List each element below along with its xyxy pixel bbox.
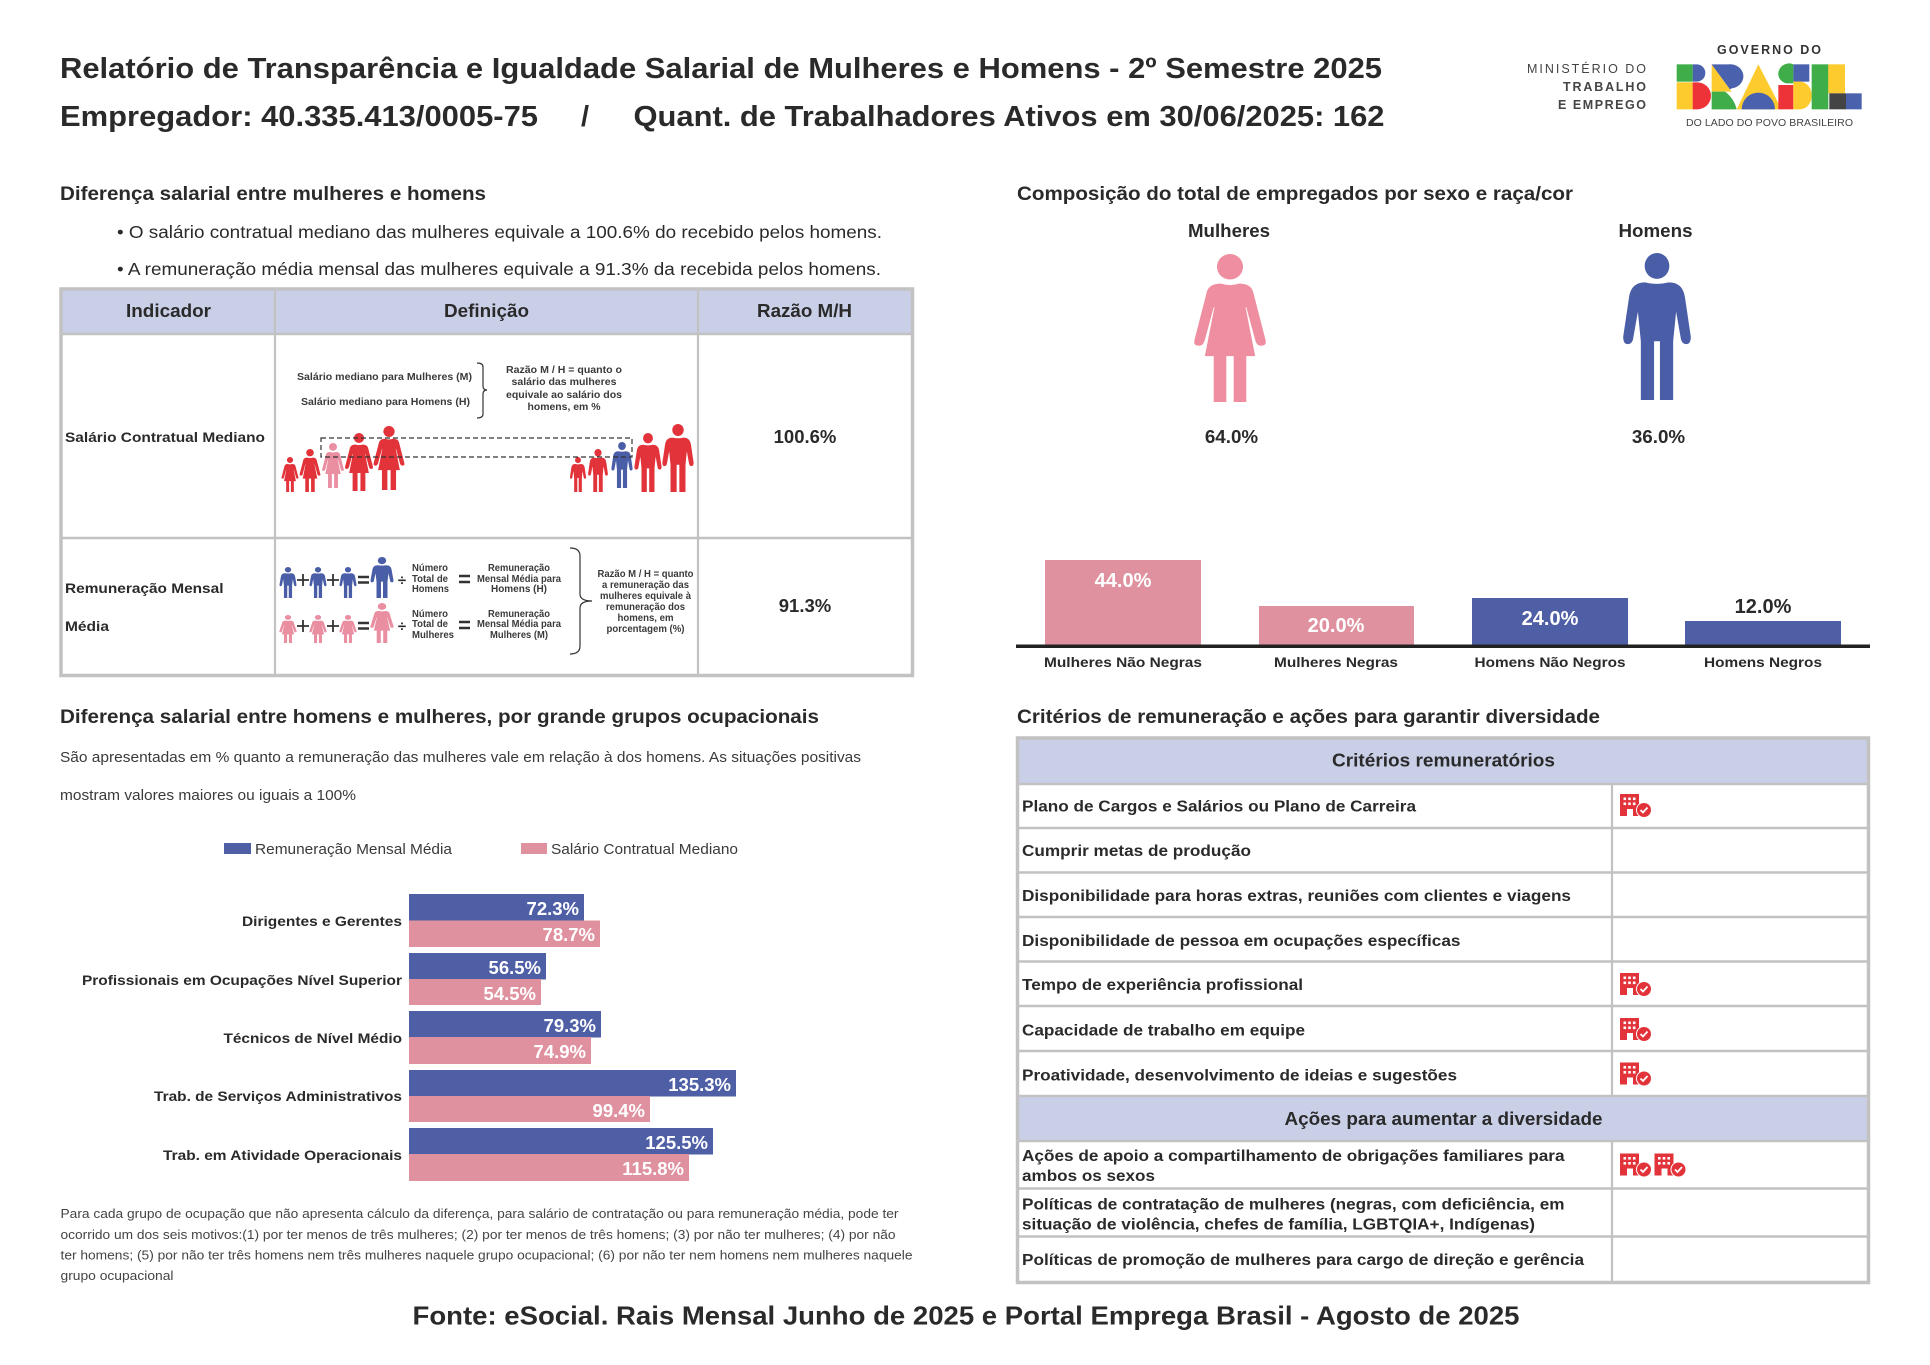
row: contratação: Políticas de contratação de mulheres (negras, com deficiência, em: [1022, 1196, 1564, 1214]
footnote: Para cada grupo de ocupação que não apresenta cálculo da diferença, para salário de contratação ou para remuneração média, pode ter: [60, 1206, 899, 1221]
women equation: Número: [412, 608, 448, 620]
group: dirigentes e gerentes: 78.7%: [543, 924, 595, 945]
bar: mulheres não negras: [1045, 560, 1201, 645]
men equation: Homens: [412, 583, 449, 595]
group: técnicos: 74.9%: [534, 1041, 586, 1062]
bar: homens não negros: 24.0%: [1522, 608, 1579, 630]
source line: Fonte: eSocial. Rais Mensal Junho de 2025 e Portal Emprega Brasil - Agosto de 2025: [412, 1300, 1520, 1330]
value: 36.0%: 36.0%: [1632, 426, 1685, 447]
table header: indicador: Indicador: [126, 300, 211, 321]
row: contratação: situação de violência, chefes de família, LGBTQIA+, Indígenas): [1022, 1216, 1535, 1234]
men equation: Remuneração: [488, 562, 550, 574]
table: indicadores: [61, 289, 912, 676]
row: proatividade: Proatividade, desenvolvimento de ideias e sugestões: [1022, 1068, 1457, 1084]
icon: woman: [1194, 254, 1266, 402]
axis labels: Homens Não Negros: [1474, 654, 1626, 670]
heading: diferença salarial: Diferença salarial entre mulheres e homens: [60, 184, 486, 205]
value: 100.6%: 100.6%: [774, 426, 836, 447]
footnote: ocorrido um dos seis motivos:(1) por ter menos de três mulheres; (2) por ter menos de três homens; (3) por não ter mulheres; (4) por não: [60, 1227, 896, 1242]
group: atividade operacionais: [163, 1128, 713, 1181]
diagram: salário mediano: equivale ao salário dos: [506, 389, 622, 401]
legend: Remuneração Mensal Média: [255, 841, 453, 858]
row label: salário contratual mediano: Salário Contratual Mediano: [65, 429, 265, 445]
group: serviços administrativos: Trab. de Serviços Administrativos: [154, 1088, 402, 1104]
women equation: Total de: [412, 618, 448, 630]
group: dirigentes e gerentes: [242, 894, 600, 947]
logo: slogan: DO LADO DO POVO BRASILEIRO: [1686, 117, 1853, 129]
diagram: remuneração média: Razão M / H = quanto: [598, 568, 694, 580]
group: técnicos: [224, 1011, 601, 1064]
label: mulheres: Mulheres: [1188, 221, 1270, 241]
description text: [60, 749, 861, 804]
group: dirigentes e gerentes: 72.3%: [527, 898, 579, 919]
diagram: remuneração média: mulheres equivale à: [600, 590, 691, 602]
panel: grupos ocupacionais: [60, 707, 913, 1283]
bar: homens negros: 12.0%: [1735, 596, 1792, 618]
logo: ministério and governo do brasil: [1527, 43, 1862, 129]
women equation: Remuneração: [488, 608, 550, 620]
diagram: salário mediano: Salário mediano para Mulheres (M): [297, 371, 472, 383]
group: técnicos: 79.3%: [544, 1015, 596, 1036]
row: ocupações específicas: Disponibilidade de pessoa em ocupações específicas: [1022, 933, 1460, 950]
logo: governo do: GOVERNO DO: [1717, 43, 1821, 57]
title line 2: Quant. de Trabalhadores Ativos em 30/06/2025: 162: [634, 101, 1384, 133]
row label: remuneração mensal média: Média: [65, 618, 109, 634]
group: profissionais: Profissionais em Ocupações Nível Superior: [82, 972, 403, 988]
group: técnicos: Técnicos de Nível Médio: [224, 1030, 402, 1046]
group: serviços administrativos: 99.4%: [593, 1100, 645, 1121]
men equation: [279, 557, 561, 598]
title line 2: /: [581, 101, 589, 133]
axis labels: Homens Negros: [1704, 654, 1822, 670]
heading: critérios: Critérios de remuneração e ações para garantir diversidade: [1017, 707, 1600, 728]
table header: razão: Razão M/H: [757, 300, 852, 321]
group: atividade operacionais: Trab. em Atividade Operacionais: [163, 1147, 402, 1163]
title block: [60, 53, 1384, 133]
axis labels: [1044, 654, 1822, 670]
diagram: salário mediano: Salário mediano para Homens (H): [301, 396, 470, 408]
section header: ações: Ações para aumentar a diversidade: [1284, 1109, 1602, 1129]
axis labels: Mulheres Não Negras: [1044, 654, 1202, 670]
row: horas extras: Disponibilidade para horas extras, reuniões com clientes e viagens: [1022, 888, 1571, 905]
diagram: remuneração média: homens, em: [618, 612, 674, 624]
logo: ministry text: E EMPREGO: [1558, 98, 1646, 112]
group: atividade operacionais: 125.5%: [645, 1132, 708, 1153]
row: tempo de experiência: Tempo de experiência profissional: [1022, 977, 1303, 994]
logo: ministry text: TRABALHO: [1563, 80, 1646, 94]
row label: remuneração mensal média: [65, 580, 224, 634]
legend: [224, 841, 738, 858]
description text: mostram valores maiores ou iguais a 100%: [60, 787, 356, 804]
group: atividade operacionais: 115.8%: [622, 1158, 684, 1179]
bar chart: sexo e raça: [1016, 560, 1870, 670]
women equation: Mensal Média para: [477, 618, 561, 630]
bar: homens não negros: [1472, 598, 1628, 645]
description text: São apresentadas em % quanto a remuneração das mulheres vale em relação à dos homens. As situações positivas: [60, 749, 861, 766]
diagram: salário mediano: [282, 363, 694, 492]
row: compartilhamento: ambos os sexos: [1022, 1168, 1155, 1185]
value: 91.3%: 91.3%: [779, 595, 831, 616]
footnote: grupo ocupacional: [60, 1268, 174, 1283]
diagram: salário mediano: salário das mulheres: [512, 376, 617, 388]
row label: remuneração mensal média: Remuneração Mensal: [65, 580, 224, 596]
bullet 1: • O salário contratual mediano das mulheres equivale a 100.6% do recebido pelos homens.: [117, 222, 882, 242]
men equation: ÷: [398, 572, 406, 589]
row: contratação: [1022, 1196, 1564, 1234]
men equation: Total de: [412, 573, 448, 585]
bar: mulheres negras: [1259, 606, 1414, 645]
footnote: [60, 1206, 913, 1283]
row: plano de cargos: Plano de Cargos e Salários ou Plano de Carreira: [1022, 798, 1416, 816]
bar: mulheres não negras: 44.0%: [1095, 570, 1152, 592]
women equation: Mulheres: [412, 629, 454, 641]
footnote: ter homens; (5) por não ter três homens nem três mulheres naquele grupo ocupacional; (6) por não ter nem homens nem mulheres naquele: [60, 1248, 913, 1262]
group: profissionais: [82, 953, 546, 1005]
panel: composição: [1016, 184, 1870, 670]
group: dirigentes e gerentes: Dirigentes e Gerentes: [242, 913, 402, 929]
diagram: remuneração média: remuneração dos: [606, 601, 685, 613]
panel: critérios de remuneração: [1017, 707, 1868, 1282]
row: compartilhamento: Ações de apoio a compartilhamento de obrigações familiares para: [1022, 1148, 1565, 1165]
section header: critérios remuneratórios: Critérios remuneratórios: [1332, 750, 1555, 770]
diagram: remuneração média: [279, 548, 694, 654]
group: serviços administrativos: [154, 1070, 736, 1122]
diagram: salário mediano: homens, em %: [528, 401, 601, 413]
row: compartilhamento: [1022, 1148, 1686, 1185]
diagram: salário mediano: Razão M / H = quanto o: [506, 364, 622, 376]
group: serviços administrativos: 135.3%: [668, 1074, 731, 1095]
title line 2: [60, 101, 1384, 133]
row: plano de cargos: [1022, 794, 1652, 818]
row: trabalho em equipe: Capacidade de trabalho em equipe: [1022, 1022, 1305, 1040]
men group: [570, 424, 694, 492]
row: trabalho em equipe: [1022, 1018, 1652, 1042]
axis labels: Mulheres Negras: [1274, 654, 1398, 670]
label: homens: Homens: [1618, 221, 1692, 241]
men equation: Número: [412, 562, 448, 574]
men equation: Mensal Média para: [477, 573, 561, 585]
logo: brasil colour mark: [1677, 63, 1862, 109]
logo: ministry text: [1527, 61, 1646, 112]
women equation: ÷: [398, 618, 406, 635]
diagram: remuneração média: porcentagem (%): [606, 623, 684, 635]
horizontal bar chart: [82, 894, 736, 1181]
heading: grupos ocupacionais: Diferença salarial entre homens e mulheres, por grande grupos ocupacionais: [60, 707, 819, 728]
table header: definição: Definição: [444, 300, 529, 321]
panel: diferença salarial: [60, 184, 912, 676]
row: promoção: Políticas de promoção de mulheres para cargo de direção e gerência: [1022, 1252, 1584, 1269]
row: metas: Cumprir metas de produção: [1022, 843, 1251, 860]
group: profissionais: 56.5%: [489, 957, 541, 978]
women group: [282, 426, 404, 492]
row: tempo de experiência: [1022, 973, 1652, 997]
group: profissionais: 54.5%: [484, 983, 536, 1004]
icon: man: [1623, 253, 1691, 400]
logo: ministry text: MINISTÉRIO DO: [1527, 61, 1646, 76]
title line 2: Empregador: 40.335.413/0005-75: [60, 101, 538, 133]
bar: mulheres negras: 20.0%: [1308, 615, 1365, 637]
men equation: Homens (H): [491, 583, 547, 595]
bullet 2: • A remuneração média mensal das mulheres equivale a 91.3% da recebida pelos homens.: [117, 259, 881, 279]
legend: Salário Contratual Mediano: [551, 841, 738, 858]
heading: composição: Composição do total de empregados por sexo e raça/cor: [1017, 184, 1574, 205]
table: critérios e ações: [1018, 738, 1868, 1282]
value: 64.0%: 64.0%: [1205, 426, 1258, 447]
bar: homens negros: [1685, 596, 1841, 645]
diagram: remuneração média: a remuneração das: [602, 579, 689, 591]
row: proatividade: [1022, 1062, 1652, 1086]
title line 1: Relatório de Transparência e Igualdade Salarial de Mulheres e Homens - 2º Semestre 2025: [60, 53, 1382, 85]
women equation: [279, 603, 561, 643]
women equation: Mulheres (M): [490, 629, 548, 641]
